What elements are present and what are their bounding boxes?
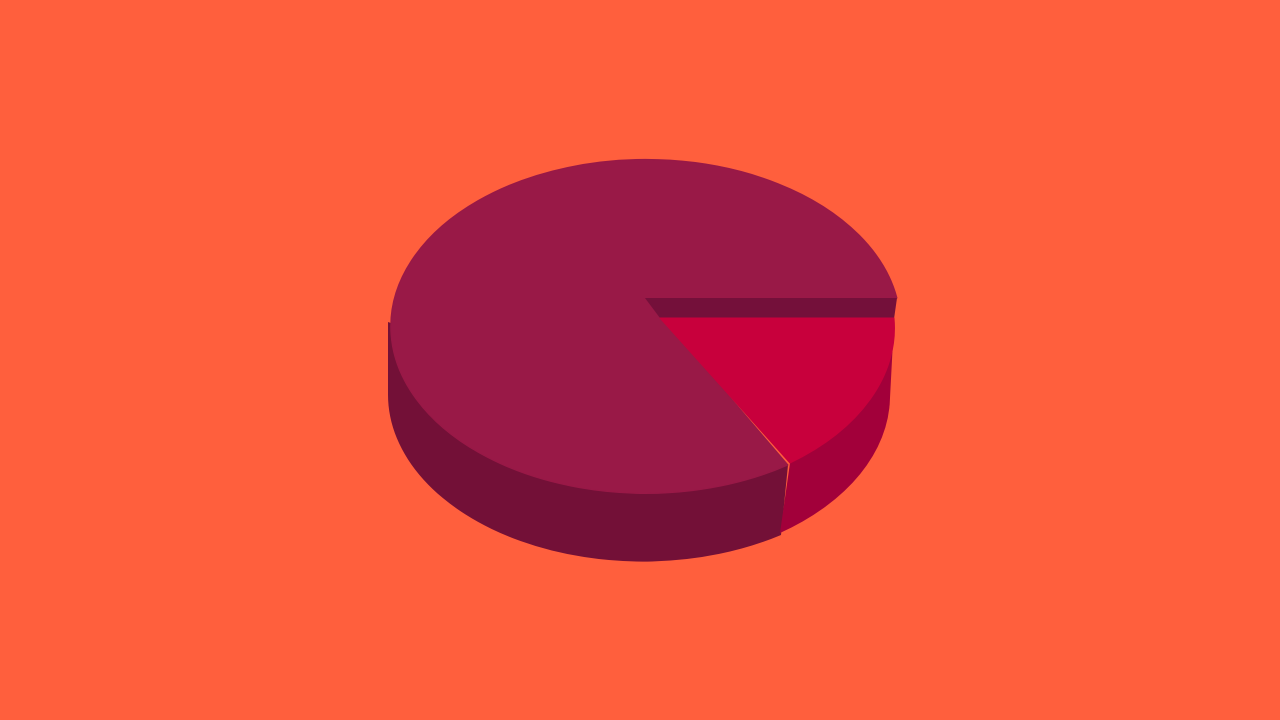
slice: main large slice — [388, 159, 897, 562]
slice: small red slice — [660, 318, 894, 533]
